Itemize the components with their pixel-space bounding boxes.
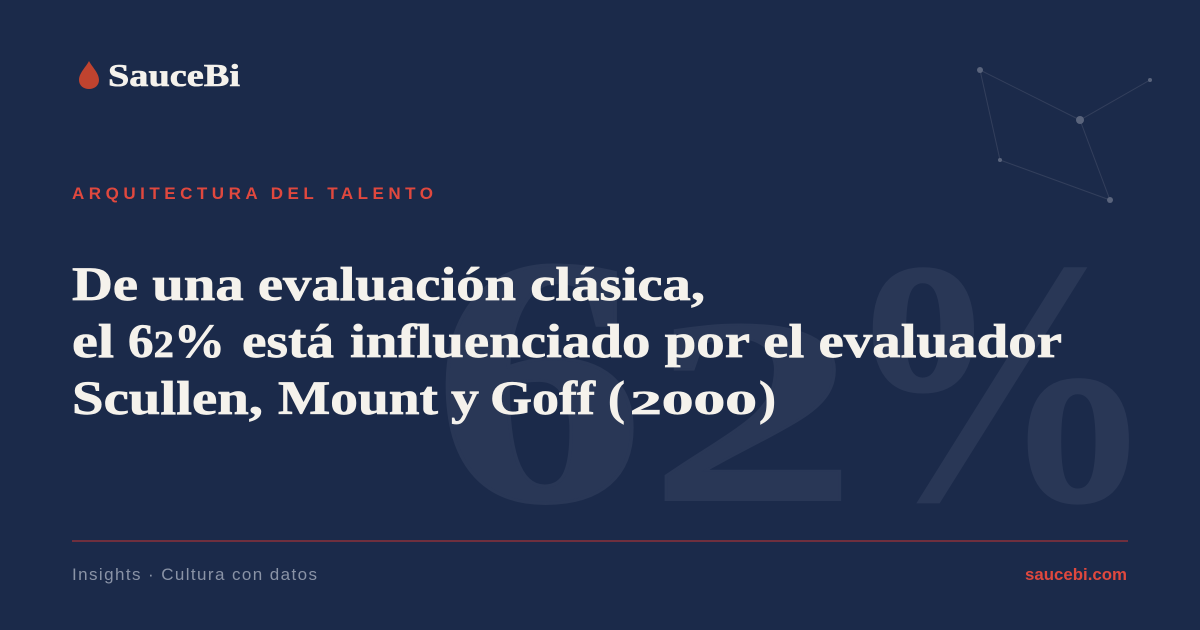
watermark: 62%: % <box>840 190 1159 576</box>
logo <box>79 57 240 93</box>
icon: sauce drop <box>79 61 99 89</box>
title: está <box>242 315 334 368</box>
title: Goff <box>490 372 596 425</box>
title: el <box>72 315 114 368</box>
divider <box>72 540 1128 542</box>
title: ) <box>759 372 776 425</box>
title: Mount <box>278 372 438 425</box>
title: y <box>451 372 479 425</box>
eyebrow: ARQUITECTURA DEL TALENTO <box>72 184 433 203</box>
footer: tagline: Insights · Cultura con datos <box>72 565 317 584</box>
footer: website: saucebi.com <box>1025 565 1127 584</box>
title: De una evaluación clásica, <box>72 258 705 311</box>
title: ( <box>608 372 625 425</box>
brand name: SauceBi <box>108 57 240 93</box>
title: influenciado por el evaluador <box>350 315 1062 368</box>
title: 2000 <box>630 385 757 422</box>
watermark: 62%: 2 <box>649 264 858 558</box>
title <box>72 258 1062 425</box>
title: Scullen, <box>72 372 263 425</box>
watermark: 62% <box>433 184 1159 577</box>
watermark: 62%: 6 <box>433 184 644 577</box>
icon: constellation <box>977 67 1152 203</box>
title: 62% <box>128 315 225 368</box>
